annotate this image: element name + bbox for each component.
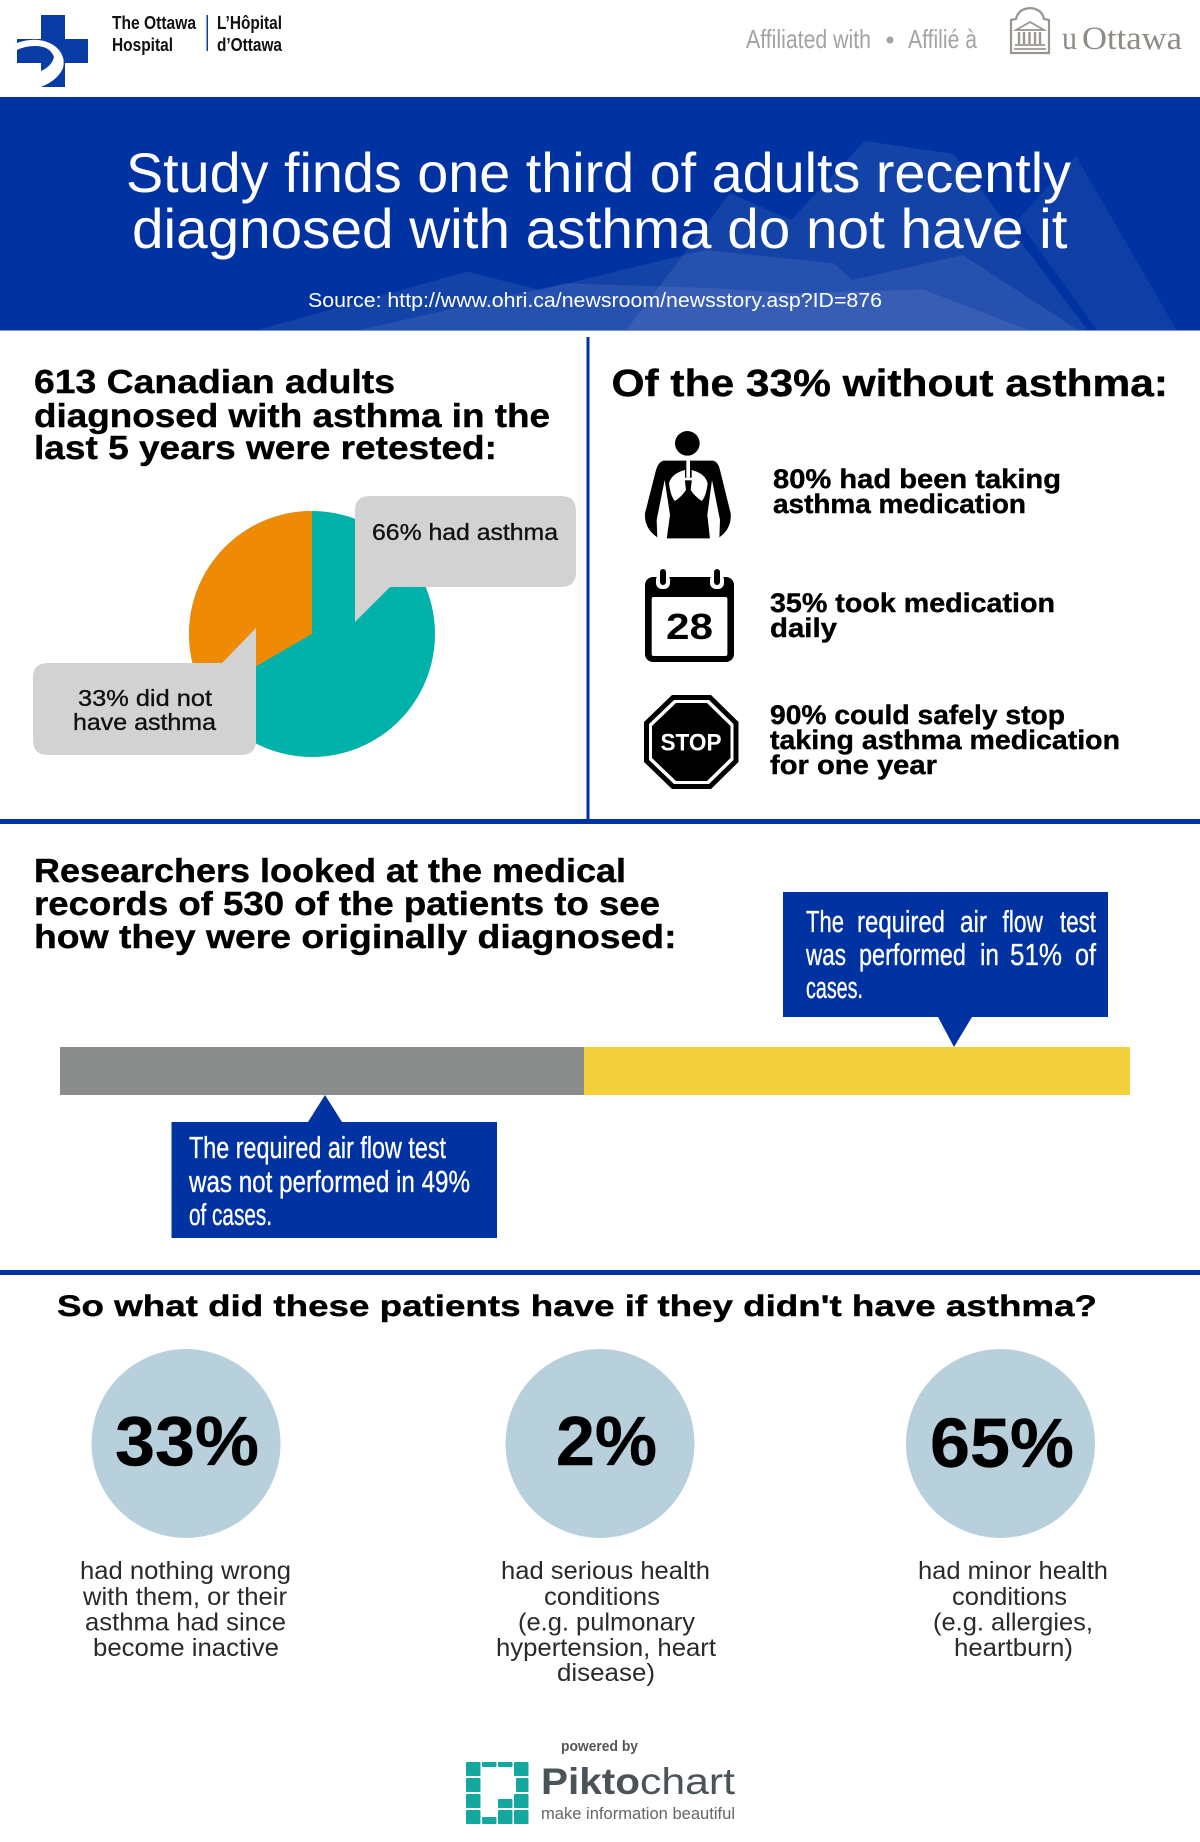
affiliation text: Affilié à (908, 24, 977, 54)
hospital name: French: L’Hôpital (217, 13, 282, 33)
panel: of the 33% without asthma (612, 363, 1168, 789)
callout: 49% not performed (172, 1095, 497, 1238)
stat: 35%: 35% took medication (770, 588, 1055, 618)
callout: 51% performed (783, 892, 1108, 1047)
Piktochart wordmark: chart (640, 1761, 736, 1802)
icon: Ottawa Hospital cross (17, 15, 88, 87)
callout: 51% performed: in (980, 937, 999, 972)
callout: 51% performed: was (805, 937, 846, 972)
callout: 49% not performed: The required air flow test (189, 1130, 446, 1165)
powered by: powered by (561, 1738, 639, 1755)
callout: 51% performed: 51% (1010, 937, 1062, 972)
description: 65%: had minor health (918, 1557, 1108, 1585)
description: 33%: become inactive (93, 1634, 279, 1662)
stat: 80%: asthma medication (773, 489, 1026, 519)
callout: 51% performed: flow (1002, 904, 1043, 939)
callout: 49% not performed: of cases. (189, 1197, 272, 1232)
icon: Piktochart logo (466, 1762, 528, 1824)
stat: 90%: taking asthma medication (770, 725, 1120, 755)
stat circle: 33%: 33% (115, 1402, 259, 1480)
stat circle: 33% (92, 1349, 280, 1538)
callout: 51% performed: air (960, 904, 987, 939)
title: Study finds one third of adults recently (126, 141, 1071, 204)
description: 2%: conditions (544, 1583, 660, 1611)
stat circle: 65% (906, 1349, 1095, 1538)
callout: 51% performed: required (857, 904, 945, 939)
heading: diagnosed with asthma in the (34, 397, 550, 434)
stat: 80%: 80% had been taking (773, 464, 1061, 494)
icon: stop sign (644, 695, 738, 789)
heading: last 5 years were retested: (34, 429, 497, 466)
Piktochart wordmark: Pikto (541, 1761, 640, 1802)
stat: 90%: 90% could safely stop (770, 700, 1065, 730)
pie chart (189, 511, 435, 757)
description: 33%: with them, or their (82, 1583, 287, 1611)
callout: 51% performed: test (1060, 904, 1096, 939)
mountain background (255, 141, 1177, 331)
callout: 33% (33, 628, 256, 755)
stat circle: 2%: 2% (556, 1402, 657, 1480)
panel: what patients had instead (57, 1290, 1108, 1687)
stat circle: 2% (506, 1349, 694, 1538)
hospital name: French: d’Ottawa (217, 35, 283, 55)
hero banner (0, 97, 1200, 331)
stat: 90%: for one year (770, 750, 938, 780)
callout: 51% performed: of (1075, 937, 1096, 972)
hospital name: English: The Ottawa (112, 13, 197, 33)
description: 65%: heartburn) (954, 1634, 1073, 1662)
title: diagnosed with asthma do not have it (132, 197, 1068, 260)
affiliation text: Affiliated with (746, 24, 871, 54)
icon: calendar: 28 (666, 606, 713, 647)
heading: Of the 33% without asthma: (612, 363, 1168, 405)
callout: 51% performed: The (806, 904, 844, 939)
callout: 51% performed: performed (859, 937, 966, 972)
footer: Piktochart branding (466, 1738, 736, 1824)
callout: 66%: 66% had asthma (372, 519, 558, 545)
description: 2%: (e.g. pulmonary (518, 1608, 696, 1636)
callout: 51% performed: cases. (806, 970, 863, 1005)
description: 65%: conditions (952, 1583, 1067, 1611)
icon: person with lungs (645, 431, 731, 539)
tagline: make information beautiful (541, 1804, 735, 1823)
panel: how patients were diagnosed (34, 852, 1130, 1238)
heading: records of 530 of the patients to see (34, 885, 660, 922)
icon: calendar (645, 569, 734, 662)
description: 33%: asthma had since (85, 1608, 286, 1636)
description: 65%: (e.g. allergies, (933, 1608, 1093, 1636)
description: 33%: had nothing wrong (80, 1557, 291, 1585)
header: hospital logo (17, 13, 283, 87)
header: university affiliation (746, 8, 1182, 57)
stacked bar (60, 1047, 1130, 1095)
panel: retest result (33, 363, 576, 757)
stat: 35%: daily (770, 613, 837, 643)
icon: uOttawa building (1011, 8, 1049, 53)
description: 2%: hypertension, heart (496, 1634, 716, 1662)
callout: 33%: have asthma (73, 709, 216, 735)
hospital name: English: Hospital (112, 35, 173, 55)
heading: 613 Canadian adults (34, 363, 395, 400)
callout: 33%: 33% did not (78, 685, 213, 711)
callout: 66% (355, 496, 576, 622)
description: 2%: disease) (557, 1659, 655, 1687)
heading: Researchers looked at the medical (34, 852, 626, 889)
uOttawa wordmark: u (1062, 21, 1077, 57)
heading: how they were originally diagnosed: (34, 918, 676, 955)
heading: So what did these patients have if they didn't have asthma? (57, 1290, 1097, 1323)
icon: stop sign: STOP (660, 730, 722, 756)
source: Source: http://www.ohri.ca/newsroom/newsstory.asp?ID=876 (308, 290, 882, 312)
stat circle: 65%: 65% (930, 1404, 1074, 1482)
uOttawa wordmark: Ottawa (1082, 21, 1182, 57)
description: 2%: had serious health (501, 1557, 710, 1585)
callout: 49% not performed: was not performed in 49% (188, 1164, 470, 1199)
